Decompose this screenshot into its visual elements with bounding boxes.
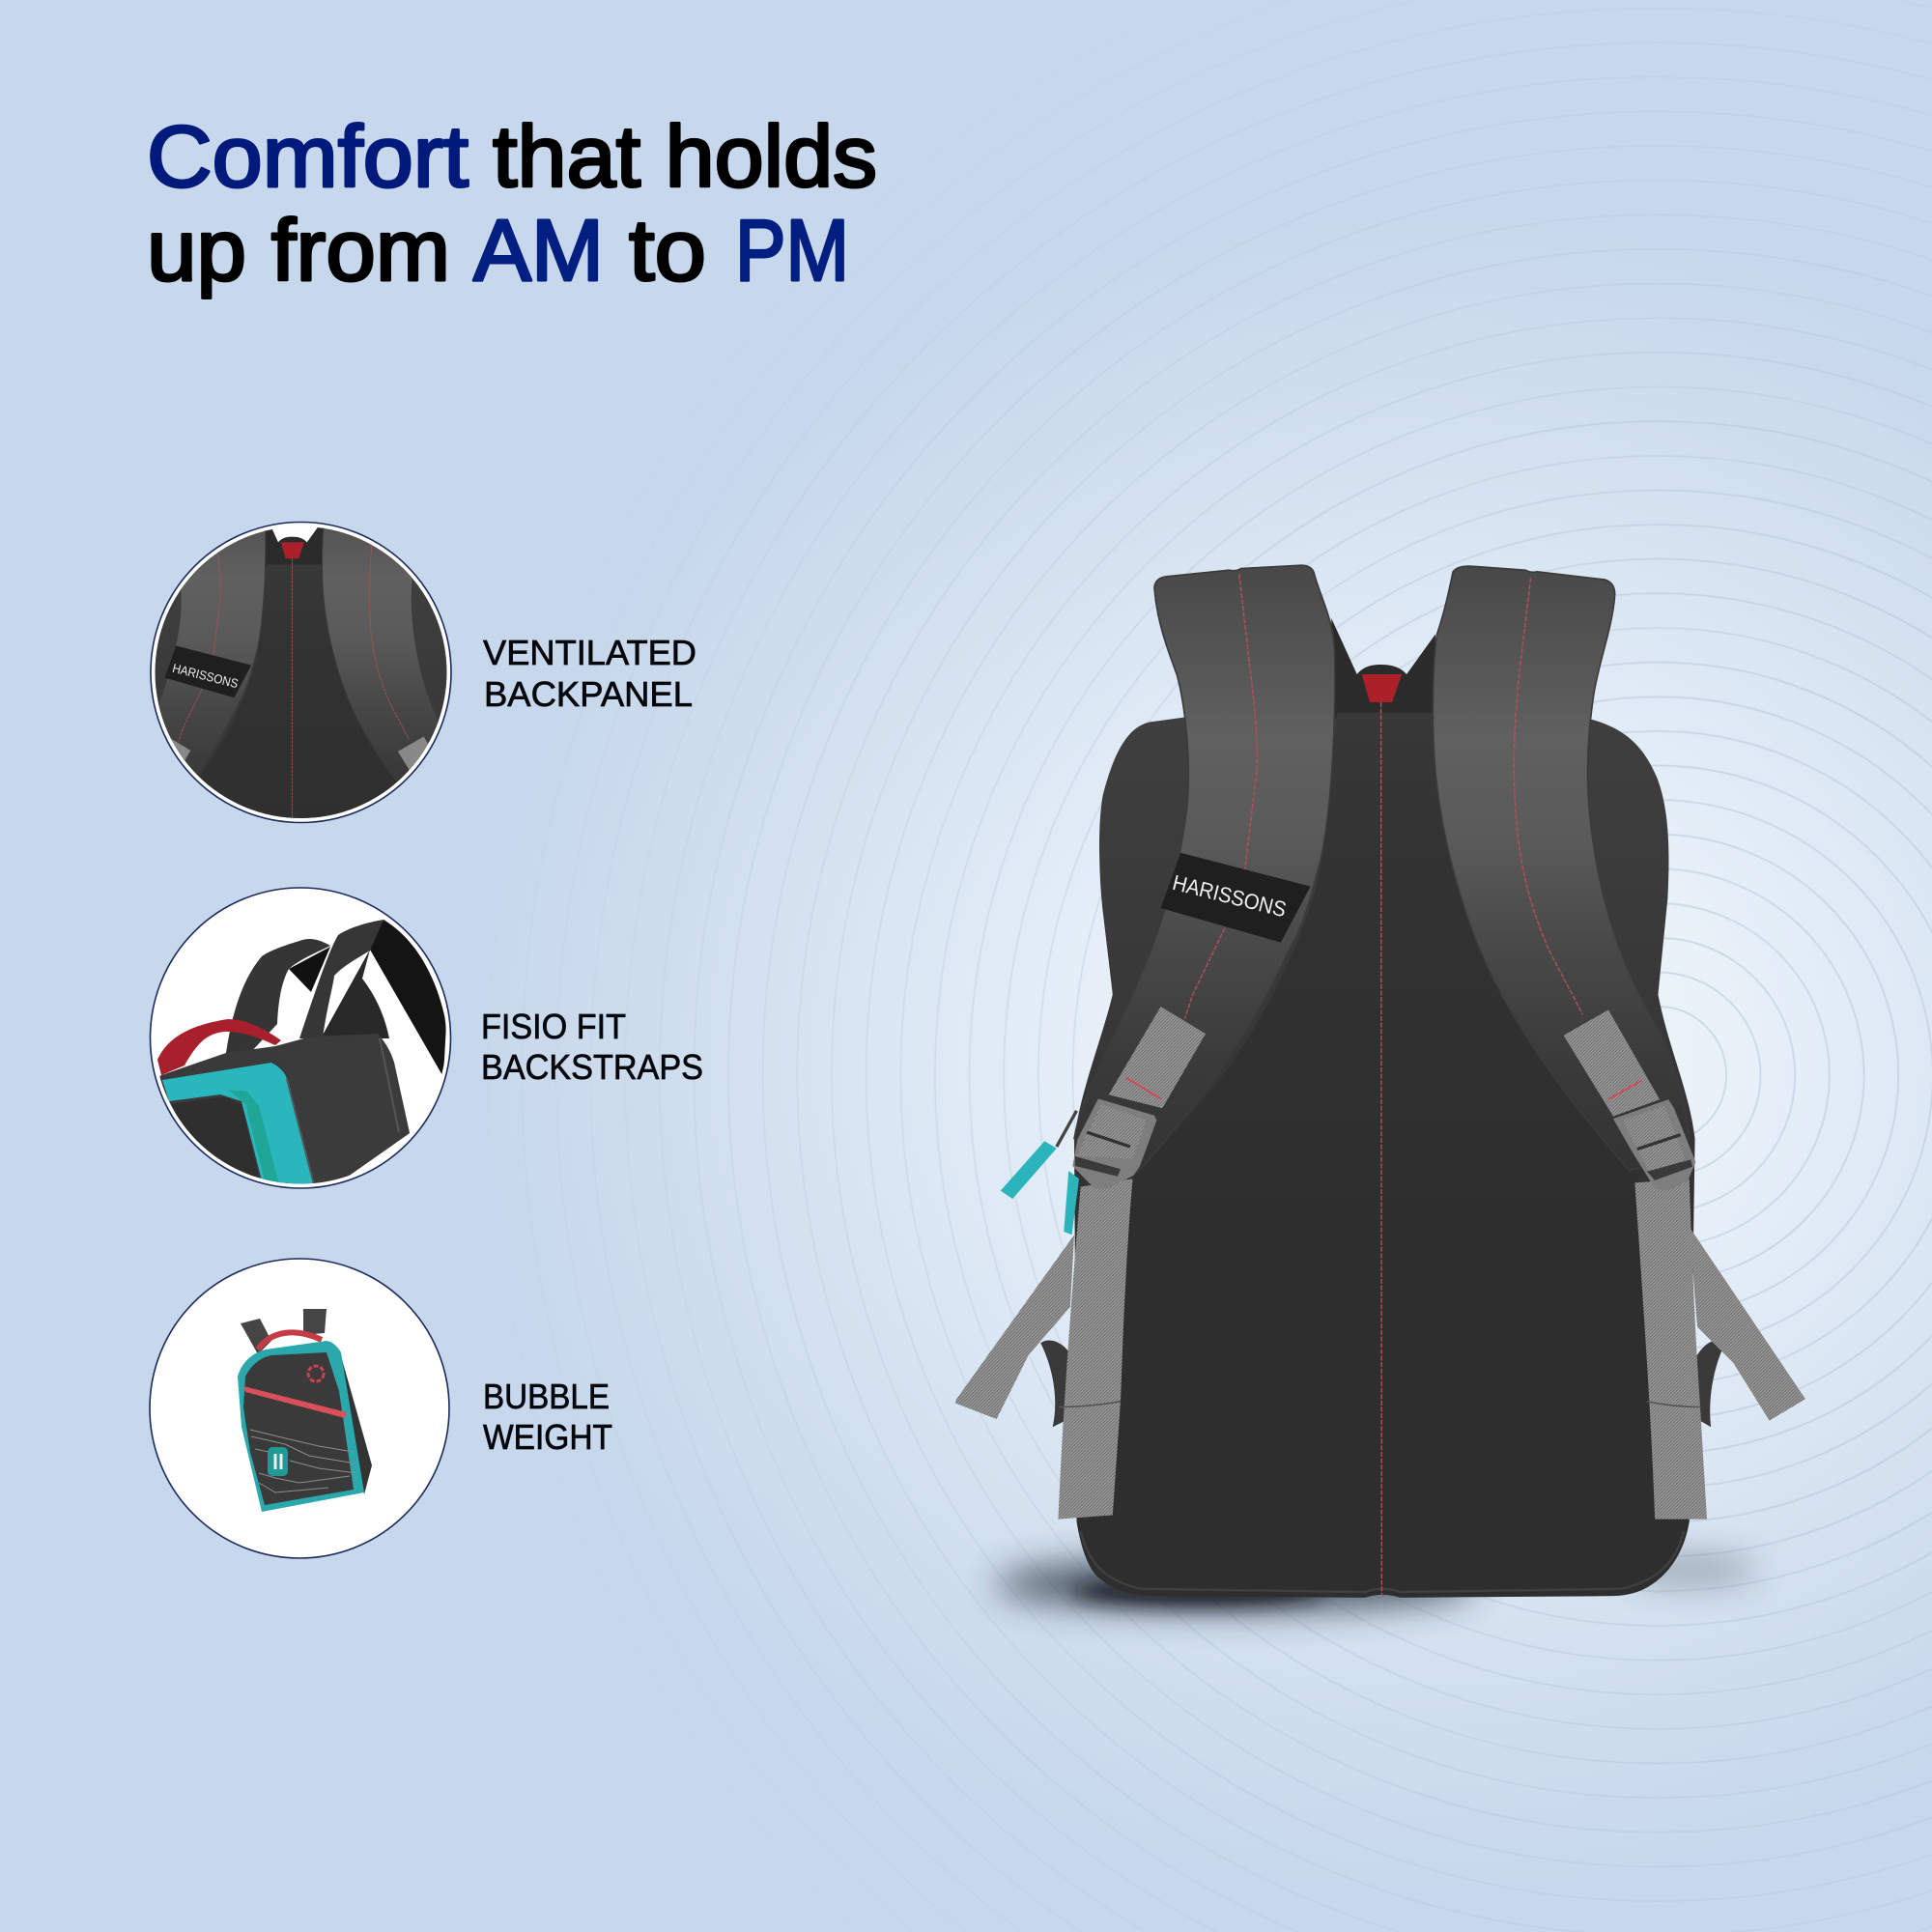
feature: ventilated backpanel xyxy=(150,522,696,823)
feature: fisio fit backstraps xyxy=(145,888,703,1193)
label: bubble weight: WEIGHT xyxy=(483,1417,612,1457)
icon: side view of straps xyxy=(145,888,450,1193)
title: Comfort xyxy=(147,109,469,206)
title: up from xyxy=(147,203,450,299)
label: ventilated backpanel xyxy=(483,633,696,714)
label: bubble weight: BUBBLE xyxy=(483,1377,610,1416)
label: ventilated backpanel: VENTILATED xyxy=(483,633,696,672)
title xyxy=(147,109,877,299)
main backpack xyxy=(955,565,1805,1598)
label: ventilated backpanel: BACKPANEL xyxy=(484,674,693,714)
feature: bubble weight xyxy=(150,1259,612,1558)
backpack shadow xyxy=(995,1556,1758,1611)
title: AM xyxy=(473,203,604,299)
icon: back panel close-up xyxy=(150,522,452,823)
title: to xyxy=(629,203,706,299)
brand tag text: HARISSONS xyxy=(1170,870,1289,922)
icon: back panel close-up: HARISSONS xyxy=(171,661,240,691)
label: fisio fit backstraps: FISIO FIT xyxy=(481,1007,626,1046)
label: fisio fit backstraps xyxy=(481,1007,703,1087)
icon: small backpack on white xyxy=(150,1259,449,1558)
title: PM xyxy=(735,203,849,299)
label: fisio fit backstraps: BACKSTRAPS xyxy=(481,1047,703,1087)
title: that holds xyxy=(493,109,877,206)
label: bubble weight xyxy=(483,1377,612,1457)
